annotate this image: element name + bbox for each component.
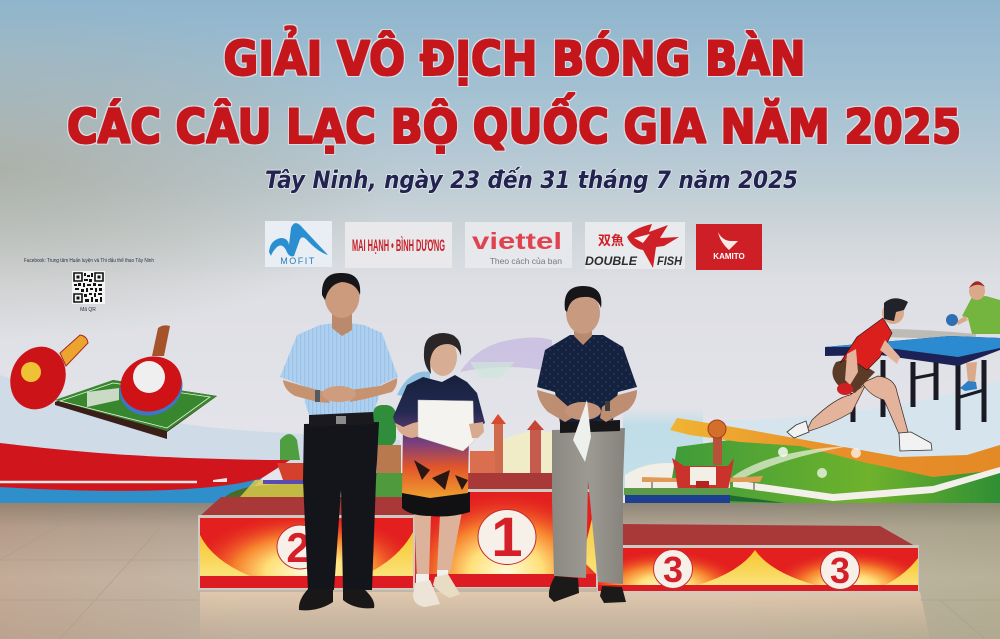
title line 1: GIẢI VÔ ĐỊCH BÓNG BÀN (224, 27, 806, 87)
podium: second place (198, 497, 414, 590)
sponsor logo: Viettel: viettel (472, 228, 562, 254)
facebook caption: Facebook: Trung tâm Huấn luyện và Thi đấu thể thao Tây Ninh (24, 257, 154, 264)
illustration: paddles on green table (1, 325, 217, 439)
location and date: Tây Ninh, ngày 23 đến 31 tháng 7 năm 2025 (265, 165, 798, 194)
right paddle with white ball (112, 325, 190, 424)
podium: third place: 3 (830, 550, 850, 591)
sponsor logo: Viettel (465, 222, 572, 268)
sponsor logo: Kamito: KAMITO (713, 252, 745, 261)
sponsor logo: Viettel: Theo cách của bạn (490, 256, 562, 266)
green player (946, 281, 1000, 391)
podium: third place (597, 524, 919, 593)
red player (787, 298, 932, 451)
sponsor logo: Double Fish (585, 222, 685, 269)
banner background (0, 0, 1000, 510)
left paddle with yellow ball (1, 335, 88, 418)
podium: second place: 2 (286, 524, 310, 571)
person: man in dark navy shirt (537, 286, 637, 603)
text: MAI HẠNH • BÌNH DƯƠNG (352, 236, 445, 255)
banner wave: right green, orange and white (623, 408, 1000, 506)
sponsor logo: Mofit (265, 221, 332, 267)
illustration: landmark monument and gate (624, 420, 763, 495)
banner art: centre pagodas, hills and plants (225, 338, 552, 497)
illustration: table tennis scene (787, 281, 1000, 451)
sponsor logo: Double Fish: DOUBLE (585, 254, 638, 268)
sponsor logo: Mofit: MOFIT (280, 256, 316, 266)
podium: first place (415, 473, 597, 588)
podium: first place: 1 (491, 505, 523, 568)
sponsor logo: Double Fish: 双魚 (598, 233, 624, 248)
sponsor logo: Mai Hanh Binh Duong (345, 222, 452, 268)
person: elderly woman holding certificate (393, 333, 485, 607)
banner wave: left red and blue (0, 443, 290, 503)
podium: third place: 3 (663, 549, 683, 590)
floor (0, 503, 1000, 639)
person: man in light blue shirt (280, 273, 398, 610)
QR caption: Mã QR (80, 307, 96, 313)
icon: QR code (72, 271, 105, 304)
sponsor logo: Double Fish: FISH (657, 254, 682, 268)
sponsor logo: Kamito (696, 224, 762, 270)
